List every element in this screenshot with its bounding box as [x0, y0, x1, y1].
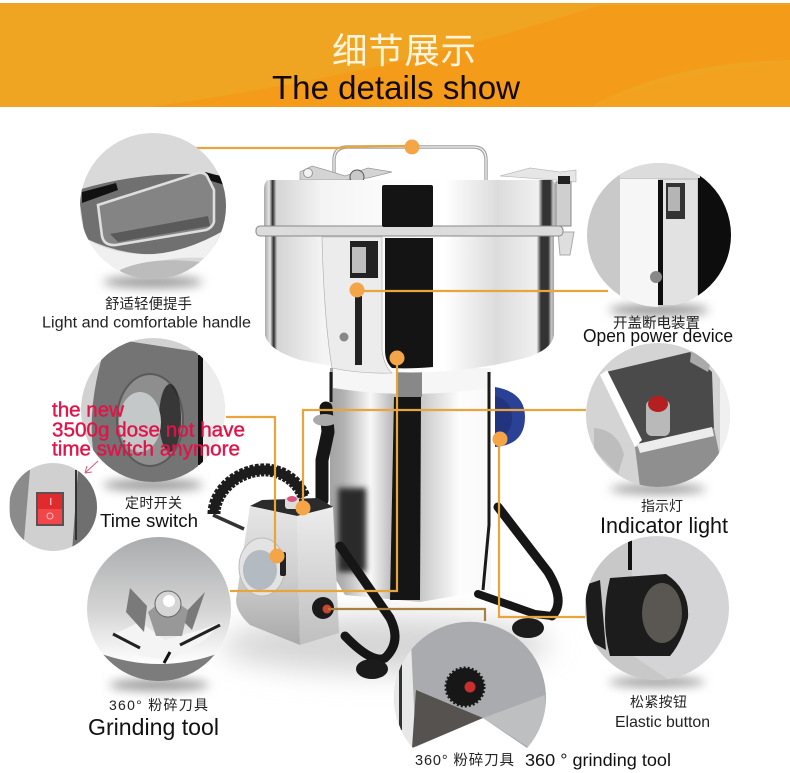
- pot body: [265, 234, 554, 373]
- label: open power device: Open power device: [583, 326, 733, 346]
- rim: [256, 226, 563, 236]
- label: open power device: [583, 315, 733, 346]
- red note: time switch anymore: [52, 438, 240, 460]
- lid clasps: [300, 166, 576, 255]
- header banner: [0, 3, 790, 107]
- panel slot: [355, 296, 362, 365]
- label: time switch: 定时开关: [125, 495, 182, 511]
- leg bracket bolt: [313, 414, 337, 426]
- title: 细节展示: [332, 31, 476, 71]
- column stripe: [390, 397, 421, 600]
- side red button: [312, 597, 334, 619]
- title: [272, 31, 520, 106]
- carry handle: [334, 147, 486, 180]
- lid: [264, 180, 556, 228]
- label: time switch: Time switch: [100, 511, 198, 531]
- label: grinding tool: Grinding tool: [88, 714, 219, 740]
- floor shadow: [220, 617, 550, 673]
- circle: handle detail: [78, 133, 228, 288]
- label: 360 grinding tool: 360° 粉碎刀具: [415, 752, 514, 769]
- leader dots: [270, 140, 508, 564]
- label: indicator light: [600, 498, 728, 538]
- label: elastic button: Elastic button: [615, 714, 710, 731]
- title: The details show: [272, 69, 520, 106]
- column edge lines: [331, 372, 489, 590]
- label: handle: Light and comfortable handle: [42, 314, 251, 332]
- screw: [340, 332, 348, 342]
- label: 360 grinding tool: [415, 750, 671, 770]
- column reflection: [338, 488, 366, 572]
- column top band: [333, 368, 489, 394]
- column: [330, 368, 491, 602]
- circle: indicator light: [584, 341, 734, 494]
- arrow: note to switch: [85, 461, 98, 473]
- control box: [236, 496, 339, 645]
- fold panel: [322, 237, 392, 373]
- lid black stripe: [382, 185, 433, 227]
- circle: time switch detail: [78, 336, 228, 491]
- red note: 3500g dose not have: [52, 420, 245, 442]
- red note: [52, 400, 245, 460]
- top indicator lamp: [285, 497, 299, 509]
- leader lines: [191, 146, 608, 621]
- label: elastic button: [615, 694, 710, 731]
- circle: open power device: [585, 161, 735, 316]
- circle: rocker switch: [9, 463, 97, 552]
- label: handle: 舒适轻便提手: [105, 296, 192, 313]
- red note: the new: [52, 400, 125, 422]
- circle: elastic button: [583, 534, 731, 687]
- coiled cord: [213, 470, 304, 529]
- blue knob: [495, 387, 525, 447]
- power switch: [350, 241, 378, 278]
- grinder machine: [213, 147, 576, 679]
- label: grinding tool: [88, 697, 219, 740]
- feet: [356, 618, 544, 679]
- label: grinding tool: 360° 粉碎刀具: [109, 697, 208, 713]
- circle: grinding tool: [85, 535, 235, 691]
- handle highlight: [334, 147, 486, 180]
- label: time switch: [100, 495, 198, 531]
- legs: [322, 408, 558, 659]
- label: handle: [42, 296, 251, 332]
- label: open power device: 开盖断电装置: [613, 315, 700, 332]
- circle: side button detail: [390, 618, 546, 752]
- label: indicator light: 指示灯: [641, 498, 683, 514]
- label: elastic button: 松紧按钮: [630, 694, 687, 710]
- timer dial: [239, 538, 285, 596]
- label: 360 grinding tool: 360 ° grinding tool: [525, 750, 671, 770]
- label: indicator light: Indicator light: [600, 513, 728, 538]
- pot black stripe: [385, 238, 433, 368]
- band stripe: [397, 368, 422, 397]
